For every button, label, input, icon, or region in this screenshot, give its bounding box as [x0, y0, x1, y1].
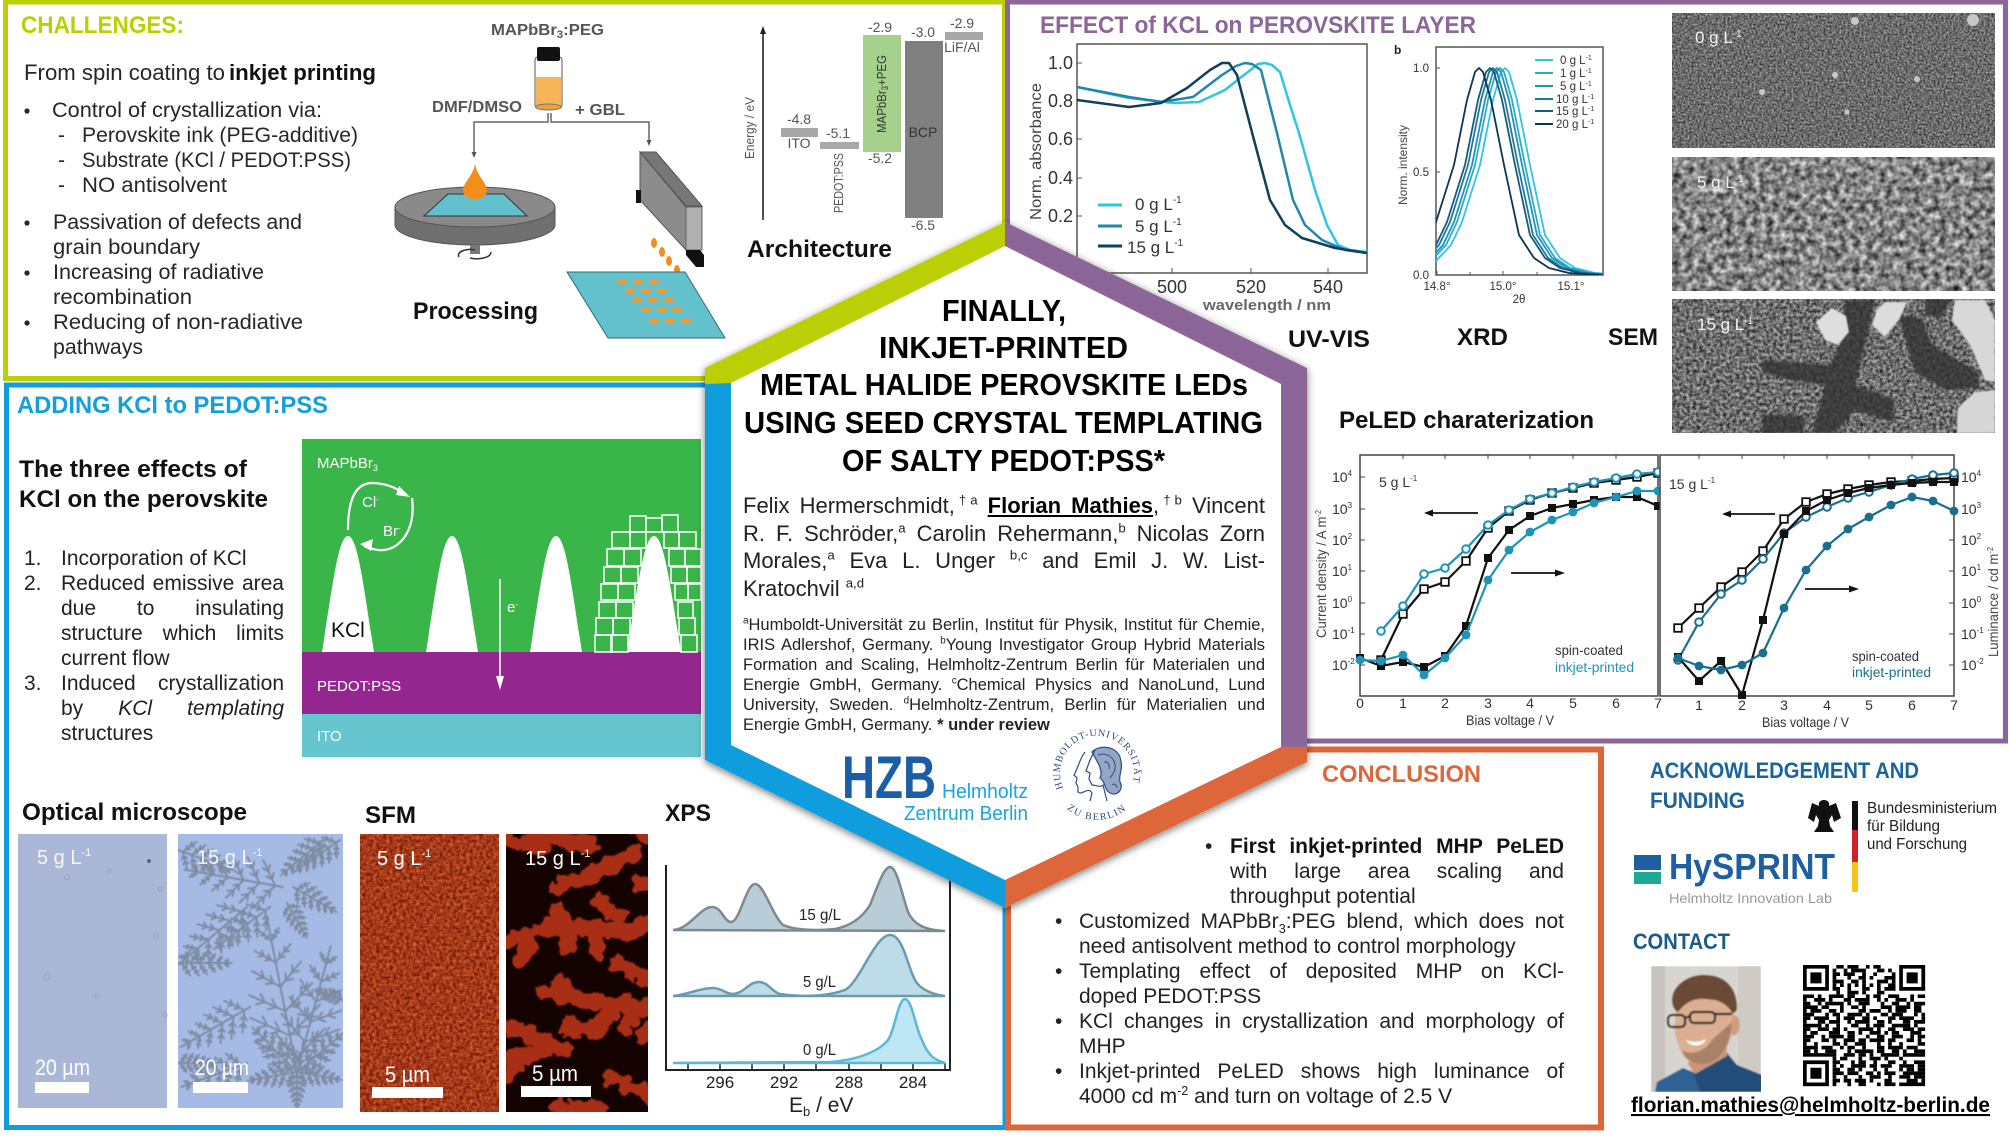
chart: XPS: XPS	[665, 800, 711, 827]
chart: XRD: 15.1°	[1558, 281, 1584, 293]
chart: XRD: 15.0°	[1490, 281, 1516, 293]
chart: UV-VIS absorbance: 0.4	[1048, 168, 1073, 188]
diagram: KCl layer stack: -	[515, 600, 518, 609]
chart: PeLED 15 g/L: 4	[1823, 697, 1831, 713]
diagram: energy levels architecture: MAPbBr	[874, 85, 889, 133]
diagram: energy levels architecture: PEDOT:PSS	[831, 153, 846, 213]
chart: UV-VIS absorbance: 0.8	[1048, 91, 1073, 111]
text block: conclusion list: 4000 cd m-2 and turn on voltage of 2.5 V	[1079, 1084, 1452, 1108]
chart: XRD: XRD	[1457, 324, 1508, 351]
diagram: KCl layer stack: 3	[373, 463, 378, 473]
chart: UV-VIS absorbance: 500	[1157, 277, 1187, 297]
subheading: three effects: The three effects of	[19, 456, 248, 483]
chart: XPS: 292	[770, 1073, 798, 1092]
chart: XRD: 0 g L	[1560, 55, 1586, 67]
chart: UV-VIS absorbance: -1	[1173, 217, 1182, 228]
chart: PeLED 15 g/L: 10	[1961, 563, 1977, 579]
chart: XPS	[665, 800, 950, 1119]
chart: PeLED 5 g/L: 10	[1332, 657, 1348, 673]
chart: PeLED 15 g/L: 15 g L	[1669, 476, 1708, 492]
logo: Humboldt University seal: · ZU BERLIN ·	[1067, 804, 1126, 820]
diagram: energy levels architecture: ITO	[787, 135, 811, 151]
panel: effect of KCl on perovskite layer	[1008, 2, 2006, 741]
diagram: processing: 3	[557, 29, 563, 41]
images: SEM	[1608, 13, 1995, 433]
text block: authors: Kratochvil a,d	[743, 575, 864, 600]
chart: PeLED 5 g/L: 3	[1484, 695, 1492, 711]
text block: affiliations: Energie GmbH, Germany. cChemical Physics and NanoLund, Lund	[743, 676, 1265, 694]
logo: HySPRINT: Helmholtz Innovation Lab	[1669, 890, 1832, 906]
chart: XRD: 15 g L	[1556, 106, 1588, 118]
text block: challenges list: inkjet printing	[229, 60, 376, 85]
chart: XRD: 14.8°	[1424, 281, 1450, 293]
text block: challenges list: From spin coating to	[24, 60, 225, 85]
chart: PeLED 15 g/L: 2	[1977, 532, 1982, 541]
QR code	[1803, 965, 1925, 1086]
chart: PeLED 5 g/L: 7	[1654, 695, 1662, 711]
chart: XRD	[1394, 45, 1604, 345]
image: SFM: 5 µm	[385, 1062, 430, 1087]
diagram: energy levels architecture	[742, 15, 983, 263]
photo: portrait	[1651, 966, 1762, 1092]
chart: PeLED 5 g/L: Bias voltage / V	[1466, 712, 1555, 728]
chart: PeLED 15 g/L: 10	[1961, 626, 1977, 642]
text block: conclusion list: Templating effect of deposited MHP on KCl-	[1079, 960, 1564, 983]
chart: PeLED 15 g/L: spin-coated	[1852, 648, 1919, 664]
diagram: energy levels architecture: -6.5	[911, 217, 935, 233]
image: SFM: -1	[581, 848, 590, 860]
chart: XPS: b	[803, 1104, 810, 1119]
chart: PeLED 15 g/L: Bias voltage / V	[1762, 714, 1850, 730]
image: SFM: 5 g L	[377, 848, 421, 870]
logo: HySPRINT: HySPRINT	[1669, 846, 1835, 887]
text block: conclusion list: MHP	[1079, 1035, 1126, 1058]
image: SFM: SFM	[365, 802, 416, 829]
contact	[1631, 929, 1990, 1117]
chart: PeLED 5 g/L: 10	[1332, 532, 1348, 548]
image: optical microscope	[18, 799, 362, 1108]
text block: challenges list: pathways	[53, 336, 143, 359]
chart: PeLED 15 g/L: 5	[1865, 697, 1873, 713]
chart: PeLED 15 g/L: 2	[1738, 697, 1746, 713]
chart: PeLED 15 g/L: 10	[1961, 469, 1977, 485]
chart: PeLED 15 g/L: -1	[1977, 626, 1984, 635]
logo: federal ministry: für Bildung	[1867, 818, 1940, 835]
chart: PeLED 5 g/L: 10	[1332, 626, 1348, 642]
acknowledgement and funding: ACKNOWLEDGEMENT AND	[1650, 758, 1919, 783]
text block: challenges list: Perovskite ink (PEG-additive)	[82, 124, 358, 147]
text block: authors: Felix Hermerschmidt,†a Florian Mathies,†b Vincent	[743, 493, 1265, 518]
chart: XRD: -1	[1586, 68, 1592, 75]
text block: three effects list: structure which limits	[61, 622, 284, 645]
diagram: KCl layer stack: MAPbBr	[317, 455, 373, 472]
title: INKJET-PRINTED	[879, 330, 1128, 365]
chart: XPS: 0 g/L	[803, 1042, 836, 1059]
chart: PeLED 5 g/L: 6	[1612, 695, 1620, 711]
image: SFM	[360, 802, 650, 1112]
diagram: processing: + GBL	[575, 102, 625, 119]
chart: PeLED 15 g/L: 10	[1961, 501, 1977, 517]
diagram: energy levels architecture: Energy / eV	[742, 97, 757, 159]
chart: UV-VIS absorbance: 1.0	[1048, 53, 1073, 73]
text block: affiliations: Formation and Scaling, Helmholtz-Zentrum Berlin für Materialen und	[743, 656, 1265, 674]
chart: XRD: Norm. intensity	[1396, 125, 1410, 205]
chart: XPS: 284	[899, 1073, 927, 1092]
acknowledgement and funding: FUNDING	[1650, 788, 1745, 813]
chart: PeLED 5 g/L: 5 g L	[1379, 474, 1410, 490]
email: florian.mathies@helmholtz-berlin.de	[1631, 1094, 1990, 1117]
chart: PeLED 5 g/L: Current density / A m	[1313, 508, 1329, 638]
panel: conclusion	[1008, 750, 1601, 1128]
chart: PeLED 5 g/L: inkjet-printed	[1555, 659, 1634, 675]
chart: XPS: 15 g/L	[799, 907, 841, 924]
chart: XRD: 0.0	[1413, 270, 1429, 282]
image: SFM: 5 µm	[532, 1061, 578, 1086]
chart: UV-VIS absorbance: 5 g L	[1135, 217, 1173, 236]
text block: three effects list: 1.	[24, 547, 42, 570]
title: METAL HALIDE PEROVSKITE LEDs	[760, 367, 1248, 402]
logo: HySPRINT	[1634, 846, 1835, 906]
logo: federal ministry	[1808, 800, 1997, 892]
contact: CONTACT	[1633, 929, 1731, 954]
text block: three effects list: Incorporation of KCl	[61, 547, 247, 570]
text block: affiliations: aHumboldt-Universität zu Berlin, Institut für Physik, Institut für Chemie,	[743, 616, 1265, 634]
subheading: three effects: KCl on the perovskite	[19, 486, 268, 513]
diagram: energy levels architecture: BCP	[909, 124, 937, 140]
chart: PeLED 15 g/L: 0	[1977, 595, 1982, 604]
text block: affiliations: University, Sweden. dHelmholtz-Zentrum, Berlin für Materialien und	[743, 696, 1265, 714]
chart: PeLED 5 g/L: 10	[1332, 501, 1348, 517]
chart: XRD: 5 g L	[1560, 81, 1586, 93]
chart: PeLED 15 g/L: 3	[1977, 501, 1982, 510]
text block: challenges list: -	[58, 174, 65, 197]
chart: PeLED 5 g/L: 3	[1348, 501, 1353, 510]
logo: federal ministry: Bundesministerium	[1867, 800, 1997, 817]
text block: three effects list: by KCl templating	[61, 697, 284, 720]
text block: three effects list: 3.	[24, 672, 42, 695]
heading: PeLED characterization: PeLED charaterization	[1339, 407, 1594, 434]
diagram: KCl layer stack	[302, 439, 701, 757]
chart: PeLED 5 g/L: 5	[1569, 695, 1577, 711]
text block: conclusion list: •	[1055, 1060, 1062, 1083]
chart: XPS: 288	[835, 1073, 863, 1092]
chart: XRD: 10 g L	[1556, 94, 1588, 106]
chart: UV-VIS absorbance: -1	[1174, 238, 1184, 249]
chart: XRD: -1	[1586, 55, 1592, 62]
text block: conclusion list: •	[1205, 835, 1212, 858]
text block: challenges list: Reducing of non-radiative	[53, 311, 303, 334]
chart: PeLED 5 g/L: -1	[1410, 474, 1418, 483]
chart: PeLED 15 g/L	[1660, 455, 2001, 730]
diagram: processing: Processing	[413, 298, 538, 325]
chart: XRD: -1	[1586, 81, 1592, 88]
diagram: processing: MAPbBr	[491, 22, 554, 39]
image: optical microscope: -1	[253, 847, 262, 859]
diagram: energy levels architecture: -4.8	[787, 111, 811, 127]
heading: adding KCl: ADDING KCl to PEDOT:PSS	[17, 392, 328, 419]
text block: conclusion list	[1055, 835, 1564, 1108]
image: optical microscope: Optical microscope	[22, 799, 247, 826]
images: SEM: SEM	[1608, 324, 1658, 351]
chart: PeLED 15 g/L: 10	[1961, 657, 1977, 673]
chart: PeLED 5 g/L: 10	[1332, 469, 1348, 485]
text block: conclusion list: Inkjet-printed PeLED shows high luminance of	[1079, 1060, 1564, 1083]
diagram: KCl layer stack: PEDOT:PSS	[317, 678, 401, 695]
chart: PeLED 5 g/L: -1	[1348, 626, 1355, 635]
text block: three effects list: Reduced emissive area	[61, 572, 284, 595]
text block: authors: R. F. Schröder,a Carolin Rehermann,b Nicolas Zorn	[743, 520, 1265, 546]
diagram: KCl layer stack: -	[398, 524, 401, 533]
diagram: energy levels architecture: Architecture	[747, 236, 892, 263]
chart: XRD: -1	[1588, 119, 1594, 126]
heading: challenges: CHALLENGES:	[21, 12, 184, 39]
chart: UV-VIS absorbance: 0 g L	[1135, 195, 1173, 214]
images: SEM: 0 g L	[1695, 28, 1733, 47]
text block: conclusion list: need antisolvent method to control morphology	[1079, 935, 1516, 958]
image: SFM: 15 g L	[525, 848, 581, 870]
chart: XPS: 296	[706, 1073, 734, 1092]
chart: PeLED 15 g/L: -2	[1977, 657, 1984, 666]
chart: PeLED 15 g/L: 1	[1695, 697, 1703, 713]
heading: conclusion: CONCLUSION	[1322, 761, 1481, 788]
title: FINALLY,	[942, 293, 1066, 328]
chart: PeLED 5 g/L: spin-coated	[1555, 642, 1623, 658]
chart: XRD: 1 g L	[1560, 68, 1586, 80]
text block: challenges list: Control of crystallization via:	[52, 99, 322, 122]
image: optical microscope: 15 g L	[197, 847, 253, 869]
chart: PeLED 5 g/L: 10	[1332, 595, 1348, 611]
logo: HZB: HZB	[842, 744, 936, 811]
chart: XRD: -1	[1588, 94, 1594, 101]
text block: challenges list: grain boundary	[53, 236, 201, 259]
chart: XRD: 20 g L	[1556, 119, 1588, 131]
text block: three effects list: structures	[61, 722, 153, 745]
heading: effect of KCl: EFFECT of KCL on PEROVSKITE LAYER	[1040, 12, 1476, 39]
image: optical microscope: 5 g L	[37, 847, 81, 869]
diagram: energy levels architecture: -2.9	[950, 15, 974, 31]
images: SEM: -1	[1744, 316, 1754, 327]
chart: PeLED 5 g/L: 0	[1356, 695, 1364, 711]
chart: PeLED 15 g/L: Luminance / cd m	[1985, 546, 2001, 657]
diagram: energy levels architecture: -5.2	[868, 150, 892, 166]
images: SEM: -1	[1733, 29, 1742, 40]
chart: XRD: -1	[1588, 106, 1594, 113]
chart: UV-VIS absorbance: -1	[1173, 195, 1182, 206]
image: optical microscope: 20 µm	[195, 1055, 249, 1080]
chart: XRD: 0.5	[1413, 167, 1429, 179]
text block: challenges list: -	[58, 124, 65, 147]
diagram: KCl layer stack: e	[507, 599, 515, 616]
chart: PeLED 15 g/L: -1	[1708, 476, 1716, 485]
chart: XPS: 5 g/L	[803, 974, 836, 991]
chart: UV-VIS absorbance: wavelength / nm	[1202, 297, 1331, 314]
text block: conclusion list: Customized MAPbBr3:PEG blend, which does not	[1079, 910, 1564, 936]
chart: PeLED 5 g/L: 10	[1332, 563, 1348, 579]
text block: affiliations	[743, 616, 1265, 734]
chart: PeLED 15 g/L: 10	[1961, 595, 1977, 611]
chart: UV-VIS absorbance: 540	[1313, 277, 1343, 297]
images: SEM: -1	[1735, 174, 1744, 185]
chart: PeLED 15 g/L: -2	[1986, 546, 1995, 554]
chart: PeLED 5 g/L: 1	[1348, 563, 1353, 572]
image: optical microscope: -1	[81, 847, 91, 859]
diagram: processing	[395, 22, 725, 338]
logo: Humboldt University seal	[1053, 729, 1142, 820]
text block: conclusion list: •	[1055, 960, 1062, 983]
chart: PeLED 5 g/L: 2	[1348, 532, 1353, 541]
text block: conclusion list: First inkjet-printed MHP PeLED	[1230, 835, 1564, 858]
chart: XRD: 1.0	[1413, 63, 1429, 75]
title: USING SEED CRYSTAL TEMPLATING	[744, 405, 1263, 440]
text block: conclusion list: doped PEDOT:PSS	[1079, 985, 1261, 1008]
chart: UV-VIS absorbance: Norm. absorbance	[1028, 83, 1045, 220]
chart: UV-VIS absorbance: UV-VIS	[1288, 326, 1370, 353]
diagram: processing: :PEG	[563, 22, 604, 39]
chart: PeLED 5 g/L: 4	[1348, 469, 1353, 478]
chart: PeLED 5 g/L: -2	[1348, 657, 1355, 666]
chart: PeLED 15 g/L: inkjet-printed	[1852, 664, 1931, 680]
diagram: KCl layer stack: -	[376, 495, 379, 504]
chart: UV-VIS absorbance: 520	[1236, 277, 1266, 297]
text block: affiliations: Energie GmbH, Germany. * under review	[743, 716, 1050, 734]
diagram: energy levels architecture: LiF/Al	[944, 39, 980, 55]
text block: conclusion list: KCl changes in crystallization and morphology of	[1079, 1010, 1564, 1033]
chart: PeLED 5 g/L: 1	[1399, 695, 1407, 711]
image: SFM: -1	[421, 848, 431, 860]
text block: challenges list	[24, 60, 376, 359]
logo: Humboldt University seal: HUMBOLDT-UNIVERSITÄT	[1053, 729, 1142, 790]
chart: PeLED 15 g/L: 7	[1950, 697, 1958, 713]
text block: three effects list: 2.	[24, 572, 42, 595]
text block: authors: Morales,a Eva L. Unger b,c and Emil J. W. List-	[743, 548, 1265, 573]
chart: PeLED 5 g/L: 2	[1441, 695, 1449, 711]
text block: three effects list: current flow	[61, 647, 170, 670]
diagram: energy levels architecture: -3.0	[911, 24, 935, 40]
chart: PeLED 5 g/L: -2	[1314, 509, 1323, 517]
diagram: processing: DMF/DMSO	[432, 99, 522, 116]
chart: XRD: 2θ	[1513, 294, 1525, 306]
images: SEM: 5 g L	[1697, 173, 1735, 192]
acknowledgement and funding	[1634, 758, 1997, 906]
diagram: KCl layer stack: KCl	[331, 619, 365, 642]
logo: HZB: Helmholtz	[942, 781, 1028, 803]
chart: PeLED 5 g/L: 0	[1348, 595, 1353, 604]
text block: challenges list: recombination	[53, 286, 192, 309]
text block: challenges list: Increasing of radiative	[53, 261, 264, 284]
diagram: energy levels architecture: 3	[880, 86, 890, 90]
text block: three effects list: Induced crystallization	[61, 672, 284, 695]
chart: PeLED 15 g/L: 3	[1780, 697, 1788, 713]
chart: XPS: / eV	[810, 1094, 853, 1117]
text block: conclusion list: with large area scaling and	[1230, 860, 1564, 883]
diagram: KCl layer stack: Br	[383, 523, 398, 540]
text block: conclusion list: •	[1055, 1010, 1062, 1033]
panel: adding KCl to PEDOT:PSS	[6, 385, 1005, 1128]
text block: challenges list: NO antisolvent	[82, 174, 227, 197]
text block: challenges list: Passivation of defects and	[53, 211, 302, 234]
image: optical microscope: 20 µm	[35, 1055, 90, 1080]
logo: HZB	[842, 744, 1028, 825]
title: OF SALTY PEDOT:PSS*	[842, 443, 1166, 478]
title	[744, 293, 1263, 478]
hexagon frame	[705, 222, 1307, 908]
chart: PeLED 15 g/L: 1	[1977, 563, 1982, 572]
chart: UV-VIS absorbance	[1028, 44, 1370, 353]
chart: UV-VIS absorbance: 15 g L	[1127, 238, 1174, 257]
diagram: energy levels architecture: -5.1	[826, 125, 850, 141]
chart: UV-VIS absorbance: 0.6	[1048, 129, 1073, 149]
diagram: energy levels architecture: -2.9	[868, 19, 892, 35]
chart: PeLED 15 g/L: 6	[1908, 697, 1916, 713]
diagram: KCl layer stack: Cl	[362, 494, 376, 511]
subheading: three effects	[19, 456, 268, 513]
images: SEM: 15 g L	[1697, 315, 1744, 334]
text block: conclusion list: •	[1055, 910, 1062, 933]
text block: three effects list	[24, 547, 284, 745]
chart: PeLED 15 g/L: 10	[1961, 532, 1977, 548]
text block: affiliations: IRIS Adlershof, Germany. bYoung Investigator Group Hybrid Materials	[743, 636, 1265, 654]
logo: HZB: Zentrum Berlin	[904, 803, 1028, 825]
diagram: energy levels architecture: +PEG	[874, 55, 889, 86]
text block: authors	[743, 493, 1265, 600]
panel: challenges	[6, 2, 1004, 378]
diagram: KCl layer stack: ITO	[317, 728, 342, 745]
chart: UV-VIS absorbance: 0.2	[1048, 206, 1073, 226]
text block: challenges list: Substrate (KCl / PEDOT:PSS)	[82, 149, 351, 172]
chart: PeLED 5 g/L	[1313, 455, 1662, 728]
chart: XPS: E	[789, 1094, 803, 1117]
text block: three effects list: due to insulating	[61, 597, 284, 620]
logo: federal ministry: und Forschung	[1867, 836, 1967, 853]
text block: conclusion list: throughput potential	[1230, 885, 1416, 908]
chart: PeLED 15 g/L: 4	[1977, 469, 1982, 478]
chart: XRD: b	[1394, 43, 1401, 57]
chart: PeLED 5 g/L: 4	[1526, 695, 1534, 711]
text block: challenges list: -	[58, 149, 65, 172]
